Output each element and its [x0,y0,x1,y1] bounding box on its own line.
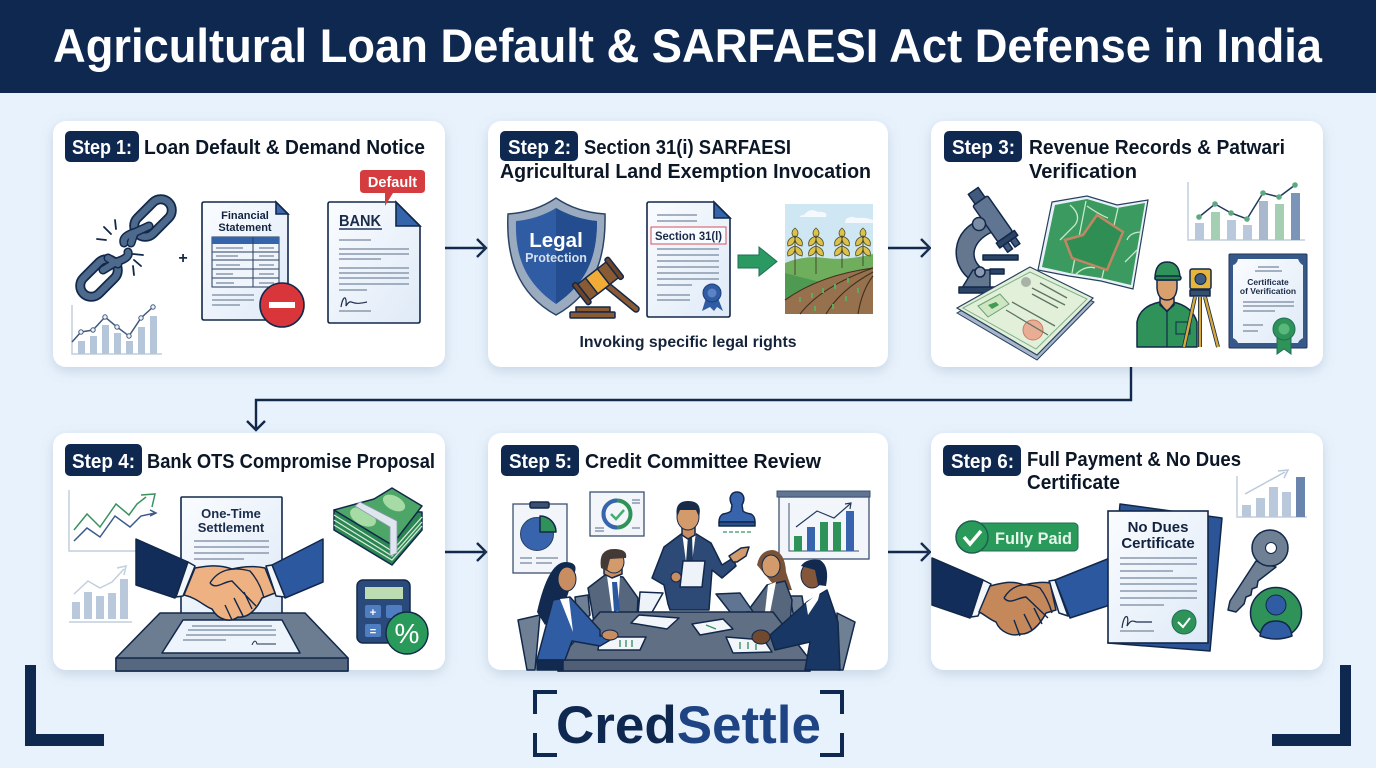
small chart [1237,470,1307,517]
panel: step 2 section 31(i) exemption [488,121,888,367]
icon: handshake over settlement [136,539,323,620]
icon: calculator with percent: + [370,607,376,619]
step 3 heading [944,131,1285,183]
presentation board chart [777,491,870,559]
icon: patwari surveyor [1137,262,1218,347]
title banner: Agricultural Loan Default & SARFAESI Act Defense in India [53,19,1323,72]
step 2 heading [500,131,871,183]
step 5 heading [501,445,821,476]
step 3 heading: Revenue Records & Patwari [1029,137,1285,159]
seated man with blue tie [588,549,663,628]
fully paid badge: Fully Paid [995,529,1072,548]
financial statement document [202,202,304,327]
step 6 heading: Full Payment & No Dues [1027,449,1241,471]
icon: broken chain [76,195,176,301]
icon: legal protection shield with gavel: Legal [529,229,583,252]
title banner [0,0,1376,93]
seated woman in grey jacket [716,550,792,625]
no dues certificate: Certificate [1121,535,1195,552]
icon: user circle [1250,588,1302,639]
step 3 heading: Verification [1029,161,1137,183]
icon: key [1228,530,1288,612]
certificate of verification: of Verification [1240,286,1296,296]
arrow: step 5 to step 6 [888,543,930,561]
certificate of verification [1229,254,1307,354]
section 31(i) document [647,202,730,317]
step 2 heading: Agricultural Land Exemption Invocation [500,161,871,183]
certificate of verification: Certificate [1247,277,1289,287]
demand notice bank document with default tag: BANK [339,213,382,230]
growth line chart [69,490,156,551]
step 3 heading: Step 3: [952,137,1015,159]
section 31(i) document: Section 31(l) [655,229,722,243]
icon: land map [1038,196,1148,289]
seated woman in blue jacket [537,562,618,670]
step 1 heading [65,131,425,162]
chairs [518,595,855,670]
panel: step 4 bank OTS proposal [53,433,445,671]
one-time settlement document: Settlement [198,520,265,535]
arrow: step 2 to step 3 [888,239,930,257]
CredSettle logo: CredSettle [556,696,821,755]
fully paid badge [956,521,1078,553]
small chart [1188,182,1305,240]
icon: handshake [932,558,1110,636]
step 6 heading: Certificate [1027,472,1120,494]
icon: stack of money [334,488,422,565]
icon: approval stamp [719,492,755,532]
no dues certificate [1108,504,1222,651]
panel: step 6 full payment and no dues [931,433,1323,670]
step 4 heading: Bank OTS Compromise Proposal [147,451,435,473]
step 6 heading: Step 6: [951,451,1014,473]
step 4 heading: Step 4: [72,451,135,473]
financial statement document: Statement [218,222,272,234]
desk with signed paper [116,613,348,671]
panel: step 5 credit committee review [488,433,888,671]
right corner bracket [1272,665,1351,746]
step 1 heading: Loan Default & Demand Notice [144,137,425,159]
step 6 heading [943,445,1241,494]
conference table with papers [558,612,810,671]
one-time settlement document: One-Time [201,506,261,521]
icon: gavel [570,257,636,318]
icon: legal protection shield with gavel: Protection [525,251,587,265]
arrow: step 3 down to step 4 [247,367,1131,430]
demand notice bank document with default tag [328,170,425,323]
plus sign: + [178,250,188,267]
panel: step 1 loan default and demand notice [53,121,445,367]
icon: calculator with percent: % [395,618,419,649]
icon: legal protection shield with gavel [508,198,636,318]
icon: calculator with percent [357,580,428,654]
step 2 heading: Section 31(i) SARFAESI [584,137,791,159]
step 5 heading: Step 5: [509,451,572,473]
panel: step 3 revenue records verification [931,121,1323,367]
standing presenter [652,501,749,610]
one-time settlement document [181,497,282,615]
step 5 heading: Credit Committee Review [585,451,821,473]
icon: microscope [956,185,1022,293]
arrow: step 4 to step 5 [445,543,486,561]
seated man in navy suit [752,560,840,670]
financial statement document: Financial [221,210,269,222]
demand notice bank document with default tag: Default [368,175,417,191]
step 2 heading: Step 2: [508,137,571,159]
land record certificate [957,267,1094,360]
icon: calculator with percent: = [370,626,376,638]
growth bar chart [69,566,132,622]
farmland illustration [785,204,873,314]
small chart [72,305,162,354]
approval check card [590,492,644,536]
clipboard pie chart [513,502,567,573]
step 1 heading: Step 1: [72,137,132,159]
no dues certificate: No Dues [1128,519,1188,536]
step 4 heading [65,444,435,476]
caption: Invoking specific legal rights [580,334,797,351]
green arrow [738,247,777,276]
left corner bracket [25,665,104,746]
arrow: step 1 to step 2 [445,239,486,257]
